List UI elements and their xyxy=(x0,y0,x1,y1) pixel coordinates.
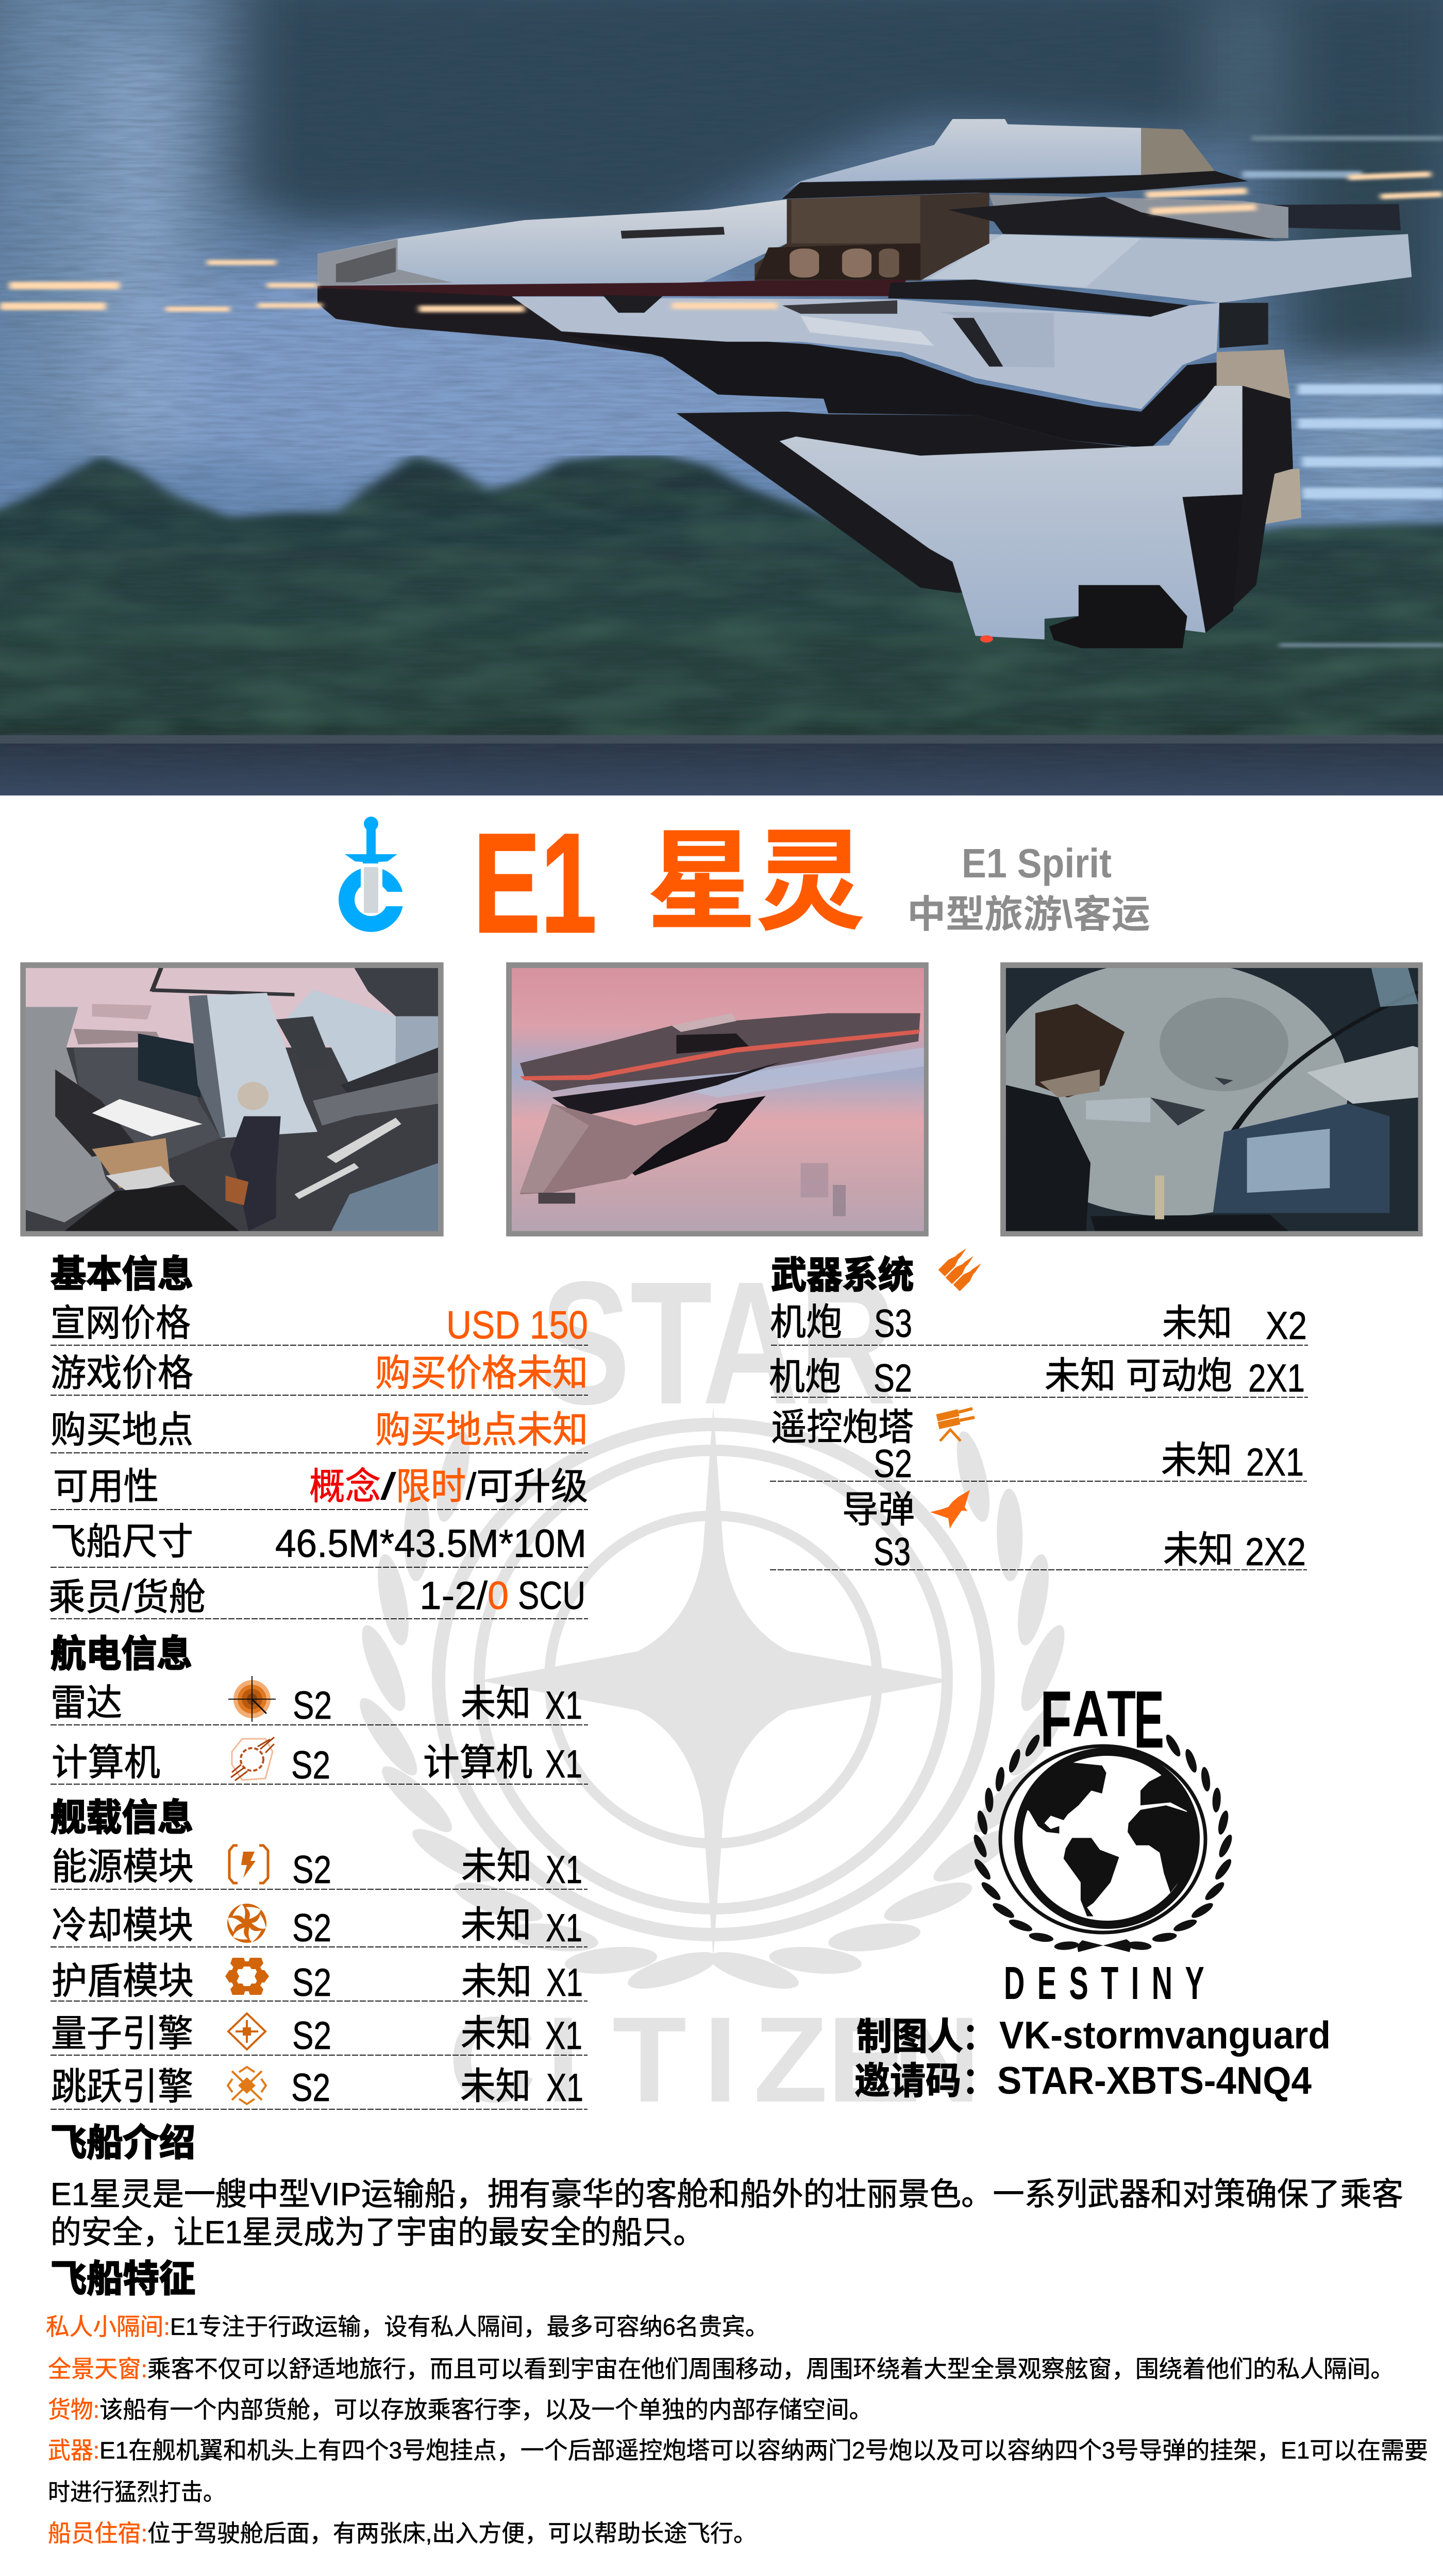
nose underside xyxy=(317,288,718,358)
icon: cooler fan xyxy=(226,1903,268,1943)
row: cooler module: 冷却模块 xyxy=(52,1905,193,1946)
wing tip engine xyxy=(1049,585,1187,648)
exposed interior section xyxy=(754,193,989,281)
credits: invite code xyxy=(854,2059,1312,2102)
icon: jump drive xyxy=(228,2067,266,2104)
icon: power bracket xyxy=(229,1845,268,1883)
feature: crew quarters: 位于驾驶舱后面，有两张床,出入方便，可以帮助长途飞行。 xyxy=(147,2520,757,2547)
row: computer: 计算机 xyxy=(423,1742,532,1784)
section: avionics xyxy=(51,1634,588,1787)
row: in-game price: 购买价格未知 xyxy=(375,1353,588,1394)
row: computer: S2 xyxy=(291,1743,330,1787)
feature: private cabin: E1专注于行政运输，设有私人隔间，最多可容纳6名贵宾。 xyxy=(170,2313,768,2340)
row: cooler module: S2 xyxy=(292,1906,331,1950)
feature: crew quarters: 船员住宿: xyxy=(48,2520,147,2547)
row: shield module: X1 xyxy=(546,1961,583,2005)
feature: panoramic windows: 全景天窗: xyxy=(48,2355,147,2382)
row: crew and cargo: 乘员/货舱 xyxy=(48,1577,206,1618)
icon: quantum diamond xyxy=(228,2013,265,2049)
row: radar: S2 xyxy=(293,1684,332,1727)
red nav light xyxy=(980,635,993,642)
logo word FATE: E xyxy=(1134,1674,1164,1765)
row: shield module: 护盾模块 xyxy=(52,1961,194,2002)
watermark laurel leaves xyxy=(351,1429,1075,1996)
row: in-game price xyxy=(51,1353,588,1395)
upper fin xyxy=(784,119,1141,193)
row: ship size xyxy=(51,1521,588,1567)
icon: computer circuit xyxy=(231,1737,274,1781)
header: subtitle xyxy=(907,840,1150,936)
row: jump drive xyxy=(51,2066,588,2110)
feature: weapons: 武器: xyxy=(48,2437,99,2464)
rear hull xyxy=(920,234,1412,303)
row: missile: 2X2 xyxy=(1245,1530,1306,1574)
hero image: E1 Spirit flying over forest lake xyxy=(0,0,1443,806)
row: purchase location xyxy=(51,1410,588,1453)
section: ship features xyxy=(46,2259,1428,2547)
row: power module: 能源模块 xyxy=(52,1846,194,1888)
row: jump drive: X1 xyxy=(546,2066,583,2110)
icon: turret xyxy=(937,1409,975,1441)
light lower wing xyxy=(779,386,1243,639)
feature: private cabin: 私人小隔间: xyxy=(46,2313,170,2340)
row: gun S2: S2 xyxy=(874,1357,912,1400)
row: power module: 未知 xyxy=(461,1846,532,1887)
credits: invite code: 邀请码 xyxy=(854,2061,961,2102)
logo globe rings xyxy=(1000,1746,1205,1933)
heading 飞船介绍: 飞船介绍 xyxy=(51,2123,195,2164)
icon: radar xyxy=(228,1676,276,1722)
introduction paragraph: 的安全，让E1星灵成为了宇宙的最安全的船只。 xyxy=(51,2215,704,2250)
credits: author: VK-stormvanguard xyxy=(999,2013,1331,2057)
row: missile: 导弹 xyxy=(842,1489,915,1531)
heading 飞船特征: 飞船特征 xyxy=(51,2259,195,2300)
header: subtitle: 中型旅游\客运 xyxy=(907,893,1150,936)
row: power module xyxy=(51,1845,588,1892)
icon: shield hexagons xyxy=(225,1958,269,1995)
row: official price xyxy=(51,1303,588,1347)
row: availability: / xyxy=(381,1466,396,1507)
header: sword logo xyxy=(339,817,407,932)
row: shield module xyxy=(51,1958,588,2005)
spaceship E1 Spirit xyxy=(317,119,1412,648)
credits: invite code: ： xyxy=(962,2061,997,2102)
section: basic info xyxy=(48,1254,588,1619)
blue thruster streaks xyxy=(1243,135,1443,647)
row: crew and cargo: 1-2/ xyxy=(420,1574,488,1618)
feature: cargo: 货物: xyxy=(48,2396,99,2423)
row: gun S2 xyxy=(769,1355,1308,1400)
logo wreath xyxy=(971,1733,1234,1952)
mid hull xyxy=(512,297,1219,409)
hero background scenery xyxy=(0,0,1443,806)
logo word FATE: T xyxy=(1107,1677,1136,1750)
row: crew and cargo: 0 xyxy=(488,1574,509,1618)
feature: weapons xyxy=(48,2437,1428,2505)
row: availability: 可用性 xyxy=(53,1466,159,1507)
row: ship size: 飞船尺寸 xyxy=(51,1521,193,1563)
upper fin dark underside xyxy=(782,171,1248,199)
row: cooler module xyxy=(51,1903,588,1950)
row: missile: S3 xyxy=(874,1530,911,1574)
row: quantum drive: S2 xyxy=(292,2014,331,2058)
row: gun S2: 2X1 xyxy=(1248,1357,1305,1400)
watermark word STAR: STAR xyxy=(541,1245,896,1441)
watermark rings xyxy=(439,1425,988,1935)
row: gun S3: 未知 xyxy=(1162,1303,1232,1344)
background watermark: Star Citizen emblem xyxy=(351,1245,1075,2128)
row: radar: X1 xyxy=(545,1684,582,1727)
feature: weapons: 时进行猛烈打击。 xyxy=(48,2479,225,2505)
row: gun S2: 未知 可动炮 xyxy=(1045,1355,1232,1397)
logo word FATE: F xyxy=(1040,1674,1072,1764)
hero motion-blur texture xyxy=(0,0,1443,795)
credits: author xyxy=(857,2013,1331,2058)
watermark word CITIZEN: CITIZEN xyxy=(448,1992,980,2128)
row: missile xyxy=(770,1489,1307,1574)
feature: weapons: E1在舰机翼和机头上有四个3号炮挂点，一个后部遥控炮塔可以容纳两门2号炮以及可以容纳四个3号导弹的挂架，E1可以在需要 xyxy=(99,2437,1428,2464)
row: cooler module: X1 xyxy=(546,1906,582,1950)
row: jump drive: S2 xyxy=(291,2066,330,2110)
logo continents xyxy=(1024,1762,1200,1916)
section: components xyxy=(51,1798,588,2110)
row: availability: 限时 xyxy=(396,1466,466,1507)
row: gun S3 xyxy=(770,1302,1308,1348)
photo frame: passenger looking at moon xyxy=(989,960,1423,1236)
row: in-game price: 游戏价格 xyxy=(51,1353,193,1394)
watermark four-point star xyxy=(479,1406,952,1958)
dark belly xyxy=(561,334,1217,448)
icon: bullets xyxy=(938,1245,984,1291)
heading 武器系统: 武器系统 xyxy=(771,1255,914,1296)
row: shield module: S2 xyxy=(292,1961,331,2005)
feature: panoramic windows: 乘客不仅可以舒适地旅行，而且可以看到宇宙在他们周围移动，周围环绕着大型全景观察舷窗，围绕着他们的私人隔间。 xyxy=(147,2355,1394,2382)
row: remote turret: 2X1 xyxy=(1246,1440,1304,1484)
row: radar: 雷达 xyxy=(51,1683,122,1724)
heading 基本信息: 基本信息 xyxy=(51,1254,193,1295)
row: remote turret: 未知 xyxy=(1161,1440,1232,1481)
row: radar xyxy=(51,1676,588,1727)
logo word FATE: A xyxy=(1072,1677,1109,1750)
row: gun S3: X2 xyxy=(1266,1304,1307,1348)
row: availability: /可升级 xyxy=(466,1466,588,1507)
row: quantum drive: X1 xyxy=(545,2014,582,2058)
row: quantum drive: 量子引擎 xyxy=(51,2013,193,2055)
section: ship introduction xyxy=(51,2123,1403,2250)
logo word DESTINY: DESTINY xyxy=(1004,1957,1204,2009)
icon: missile xyxy=(930,1490,970,1529)
row: ship size: 46.5M*43.5M*10M xyxy=(275,1522,586,1566)
row: power module: X1 xyxy=(546,1848,582,1892)
section: weapons xyxy=(769,1245,1308,1574)
row: shield module: 未知 xyxy=(461,1961,532,2003)
row: official price: USD 150 xyxy=(446,1303,588,1347)
row: purchase location: 购买地点未知 xyxy=(375,1410,588,1451)
logo: Fate Destiny xyxy=(971,1674,1234,2009)
rear tan tanks xyxy=(1217,349,1290,399)
introduction paragraph xyxy=(51,2177,1403,2250)
row: jump drive: 未知 xyxy=(460,2066,531,2107)
row: gun S3: S3 xyxy=(874,1302,912,1346)
row: official price: 宣网价格 xyxy=(51,1303,191,1344)
row: computer: X1 xyxy=(545,1742,582,1786)
header: title E1 星灵: E1 xyxy=(473,804,597,962)
row: computer: 计算机 xyxy=(52,1742,160,1784)
header: title E1 星灵: 星灵 xyxy=(647,821,865,943)
row: purchase location: 购买地点 xyxy=(51,1410,193,1451)
rear upper dark block xyxy=(1252,204,1401,230)
photo frame: ship over pink clouds xyxy=(506,962,929,1236)
row: cooler module: 未知 xyxy=(461,1905,531,1946)
logo word FATE xyxy=(1040,1674,1164,1765)
row: quantum drive: 未知 xyxy=(461,2013,531,2055)
dark red stripe xyxy=(317,280,907,297)
row: jump drive: 跳跃引擎 xyxy=(51,2066,193,2108)
credits: author: ： xyxy=(962,2016,997,2058)
row: radar: 未知 xyxy=(461,1683,531,1724)
feature: cargo: 该船有一个内部货舱，可以存放乘客行李，以及一个单独的内部存储空间。 xyxy=(99,2396,872,2423)
credits: invite code: STAR-XBTS-4NQ4 xyxy=(997,2059,1312,2102)
dark lower wing back xyxy=(676,386,1293,633)
row: remote turret: S2 xyxy=(874,1442,912,1486)
nose upper hull xyxy=(317,199,787,286)
row: crew and cargo: SCU xyxy=(518,1574,585,1618)
row: remote turret: 遥控炮塔 xyxy=(771,1407,914,1448)
photo frame: cabin interior xyxy=(20,962,444,1236)
heading 航电信息: 航电信息 xyxy=(51,1634,192,1675)
heading 舰载信息: 舰载信息 xyxy=(51,1798,193,1839)
row: remote turret xyxy=(770,1407,1307,1486)
dark stripe xyxy=(888,280,1189,317)
row: gun S3: 机炮 xyxy=(770,1302,842,1343)
row: computer xyxy=(51,1737,588,1787)
row: power module: S2 xyxy=(292,1848,331,1892)
header: title E1 星灵 xyxy=(473,804,865,962)
row: availability xyxy=(51,1466,588,1510)
gun turret xyxy=(948,197,1274,239)
introduction paragraph: E1星灵是一艘中型VIP运输船，拥有豪华的客舱和船外的壮丽景色。一系列武器和对策确保了乘客 xyxy=(51,2177,1403,2212)
row: crew and cargo xyxy=(48,1574,588,1619)
row: quantum drive xyxy=(51,2013,588,2058)
row: gun S2: 机炮 xyxy=(769,1357,841,1398)
header: subtitle: E1 Spirit xyxy=(962,840,1112,886)
credits: author: 制图人 xyxy=(857,2016,963,2058)
orange gun muzzle tracers xyxy=(0,172,1443,312)
row: missile: 未知 xyxy=(1163,1530,1233,1571)
row: availability: 概念 xyxy=(309,1466,381,1507)
